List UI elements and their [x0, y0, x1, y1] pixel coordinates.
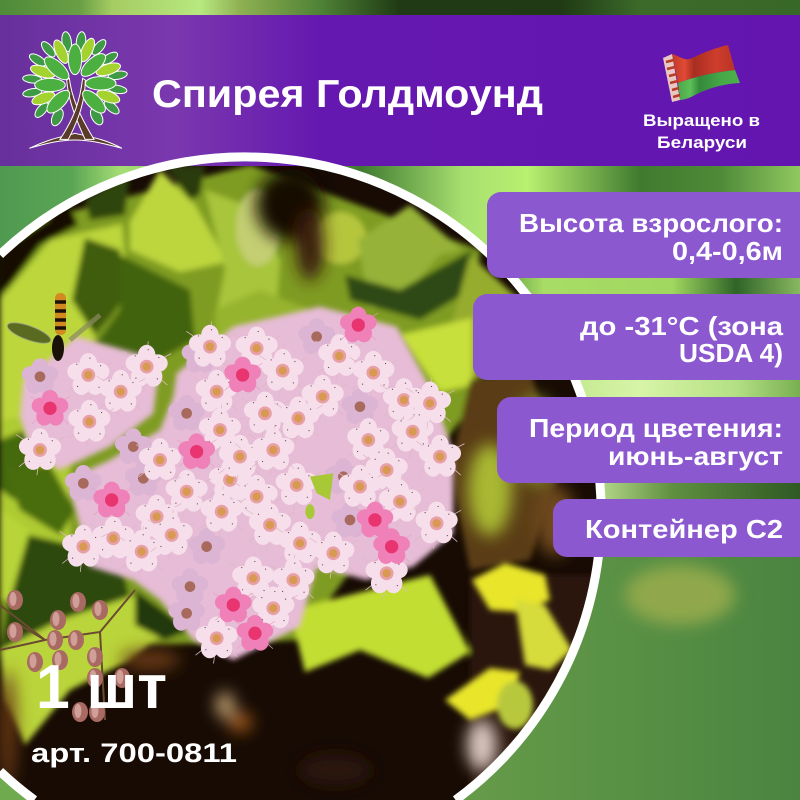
panel: height: 0,4-0,6м: [672, 236, 783, 266]
icon: flower buds: [0, 590, 135, 722]
panel: height: Высота взрослого:: [519, 208, 783, 238]
panel: hardiness: до -31°С (зона: [580, 311, 784, 341]
flag caption: Выращено в: [643, 111, 760, 130]
panel: height: [487, 192, 800, 278]
quantity label: 1 шт: [36, 653, 167, 722]
article number: арт. 700-0811: [31, 738, 237, 768]
panel: flowering period: Период цветения:: [529, 413, 783, 443]
icon: hoverfly: [5, 293, 100, 361]
flower clusters: [16, 307, 464, 664]
icon: tree logo: [22, 31, 128, 148]
panel: hardiness: [473, 294, 800, 380]
panel: container: Контейнер С2: [585, 514, 783, 544]
panel: flowering period: июнь-август: [608, 441, 783, 471]
icon: Belarus flag: [663, 45, 740, 102]
flag caption: [643, 111, 760, 152]
banner: [0, 15, 800, 166]
round photo frame ring: [0, 157, 601, 800]
title: Спирея Голдмоунд: [152, 73, 543, 116]
panel: flowering period: [497, 397, 800, 483]
blurred foliage behind the flowers: [0, 165, 600, 800]
flag caption: Беларуси: [657, 133, 747, 152]
panel: container: [553, 499, 800, 557]
panel: hardiness: USDA 4): [679, 338, 783, 368]
photo: spirea flowers in round frame: [0, 150, 610, 800]
